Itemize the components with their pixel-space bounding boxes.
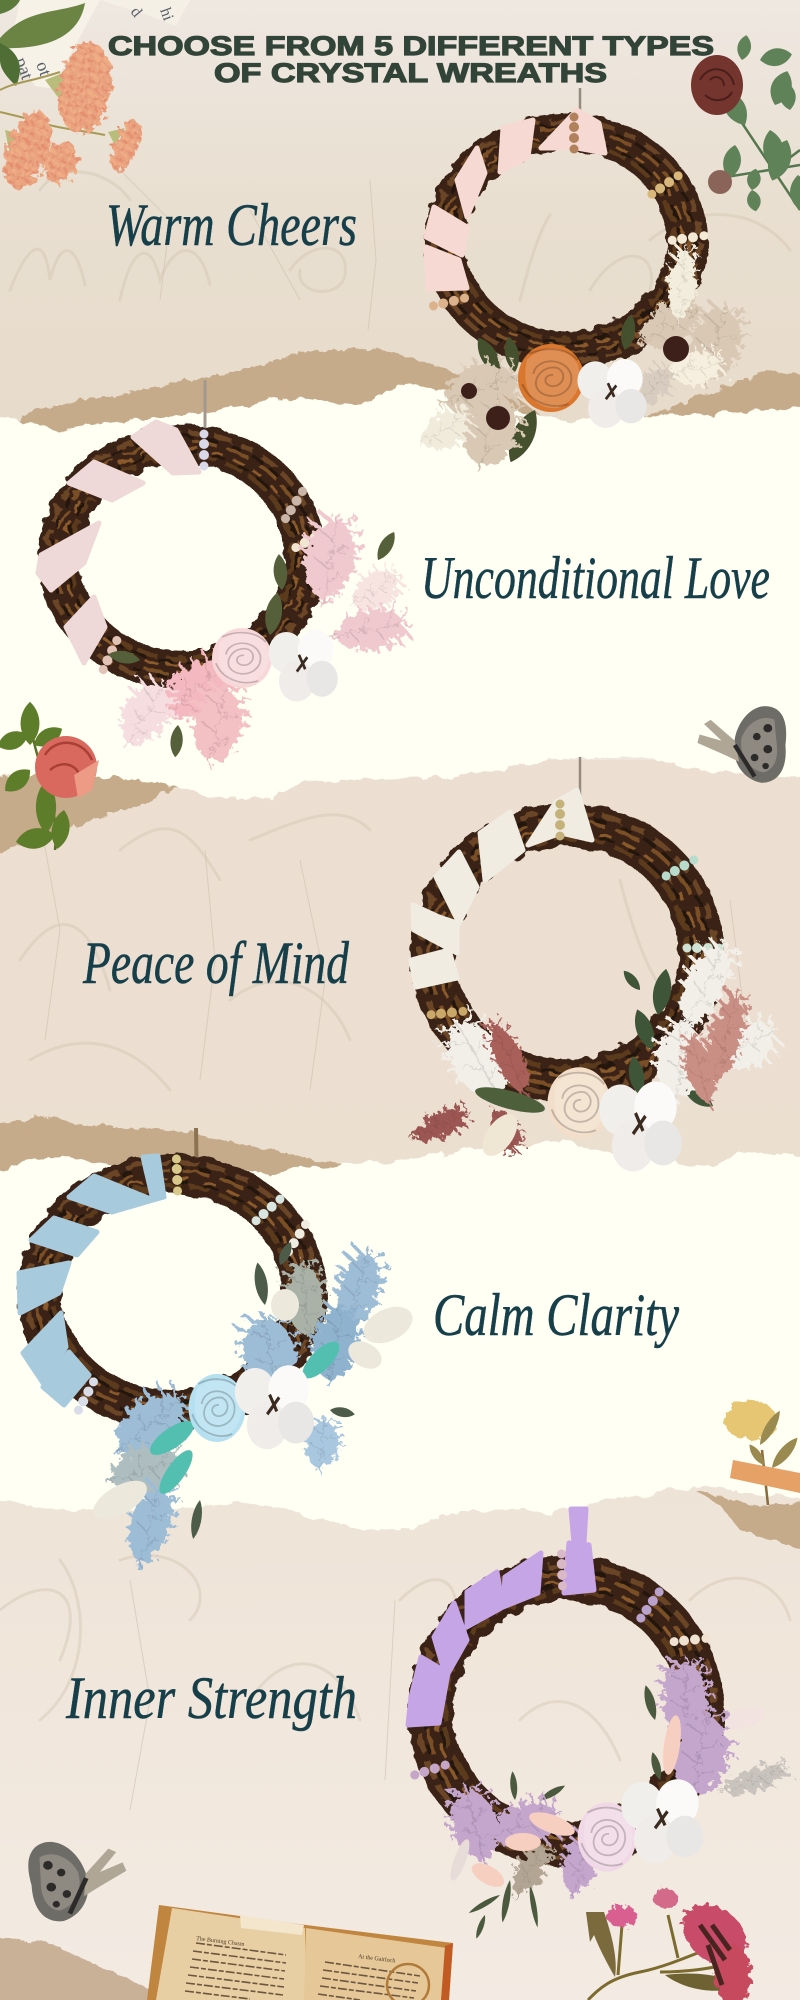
orange rose bbox=[518, 344, 584, 412]
pale pink rose bbox=[578, 1802, 636, 1872]
vine ring bbox=[47, 433, 317, 681]
label: Peace of Mind: Peace of Mind bbox=[82, 930, 350, 996]
wreath: Unconditional Love bbox=[38, 380, 416, 774]
label: Warm Cheers: Warm Cheers bbox=[106, 192, 357, 258]
wreath: Inner Strength bbox=[408, 1509, 795, 1940]
label: Calm Clarity: Calm Clarity bbox=[433, 1282, 679, 1348]
foliage leaves bbox=[471, 313, 638, 467]
cotton bbox=[577, 359, 647, 428]
hanging string bbox=[196, 1128, 197, 1196]
green sprig and bunny tail bbox=[473, 1082, 547, 1162]
lilac feathery foliage bbox=[437, 1656, 795, 1907]
foliage leaves bbox=[467, 1684, 664, 1940]
ivory leaves bbox=[87, 1289, 418, 1527]
book text: At the Gairloch bbox=[358, 1954, 396, 1965]
wreath: Peace of Mind bbox=[404, 757, 791, 1172]
tan torn strip, second divider bbox=[0, 1115, 352, 1180]
decoration: yellow dried flower with tape bbox=[724, 1400, 800, 1505]
blue ribbon bbox=[19, 1156, 164, 1405]
tan torn strip, left second divider bbox=[0, 775, 178, 853]
blue feathery foliage bbox=[94, 1241, 394, 1576]
coffee ring bbox=[387, 1964, 429, 2000]
vine ring bbox=[27, 1162, 317, 1422]
title bbox=[108, 31, 714, 88]
cream rose bbox=[548, 1067, 610, 1139]
background paper top bbox=[0, 0, 800, 440]
decoration: open book bbox=[147, 1905, 453, 2000]
pink rose bbox=[212, 628, 272, 688]
rose-brown fern bbox=[404, 984, 758, 1161]
pink feathery foliage bbox=[102, 507, 416, 774]
ivory ribbon bbox=[411, 790, 592, 987]
background paper bottom bbox=[0, 1480, 800, 2000]
book text: The Burning Chasm bbox=[196, 1936, 245, 1948]
tan torn strip, right third divider bbox=[694, 1490, 800, 1552]
wreath: Warm Cheers bbox=[408, 88, 757, 481]
foliage leaves bbox=[188, 1240, 356, 1540]
peach bunny tails bbox=[447, 1702, 767, 1892]
decoration: top-left botanical with torn paper bbox=[0, 0, 190, 195]
crystal bead bracelets bbox=[72, 1154, 312, 1416]
teal bunny tails bbox=[145, 1336, 345, 1498]
crystal bead bracelets bbox=[426, 800, 724, 1020]
light blue rose bbox=[188, 1374, 246, 1442]
background paper middle bbox=[0, 760, 800, 1180]
hanging string bbox=[204, 380, 206, 430]
decoration: top-left botanical with torn paper: d bbox=[127, 4, 145, 21]
hanging string bbox=[579, 88, 581, 114]
faint paper cracks bbox=[40, 170, 745, 1810]
title: OF CRYSTAL WREATHS bbox=[214, 58, 607, 88]
tan torn strip, first divider bbox=[20, 349, 800, 430]
cotton bbox=[621, 1779, 704, 1863]
tan torn strip, bottom left bbox=[0, 1938, 175, 2000]
decoration: top-left botanical with torn paper: hi bbox=[156, 6, 177, 24]
decoration: red rose on left bbox=[0, 702, 99, 852]
white feathery foliage bbox=[425, 930, 791, 1118]
decoration: butterfly lower left bbox=[25, 1833, 133, 1925]
crystal bead bracelets bbox=[97, 430, 330, 676]
cream band two bbox=[0, 1140, 800, 1533]
vine ring bbox=[420, 812, 714, 1094]
crystal bead bracelets bbox=[409, 1549, 711, 1781]
wreath: Calm Clarity bbox=[19, 1128, 418, 1576]
crystal bead bracelets bbox=[428, 112, 709, 312]
cotton bbox=[235, 1365, 314, 1449]
dried beige foliage bbox=[408, 242, 757, 481]
cotton bbox=[268, 630, 338, 702]
hanging string bbox=[579, 757, 581, 800]
cotton bbox=[599, 1082, 682, 1172]
book tape bbox=[240, 1915, 304, 1935]
decoration: top-left botanical with torn paper: pat bbox=[11, 55, 38, 82]
title: CHOOSE FROM 5 DIFFERENT TYPES bbox=[108, 31, 714, 61]
label: Inner Strength: Inner Strength bbox=[65, 1665, 357, 1731]
pink ribbon bbox=[426, 110, 605, 289]
cream band one bbox=[0, 383, 800, 800]
lilac ribbon bbox=[408, 1509, 594, 1725]
decoration: top-left botanical with torn paper: ot bbox=[32, 59, 56, 79]
pale pink ribbon bbox=[38, 422, 199, 663]
foliage leaves bbox=[620, 967, 716, 1111]
decoration: top-right rose bbox=[691, 34, 800, 212]
foliage leaves bbox=[107, 529, 399, 758]
faint handwriting texture bbox=[0, 172, 790, 1760]
decoration: butterfly right bbox=[697, 706, 786, 783]
vine ring bbox=[418, 1565, 714, 1857]
vine ring bbox=[433, 121, 699, 361]
decoration: pressed pink flowers bbox=[586, 1889, 759, 2000]
dark seed heads bbox=[461, 336, 689, 430]
book text bbox=[185, 1936, 420, 2000]
